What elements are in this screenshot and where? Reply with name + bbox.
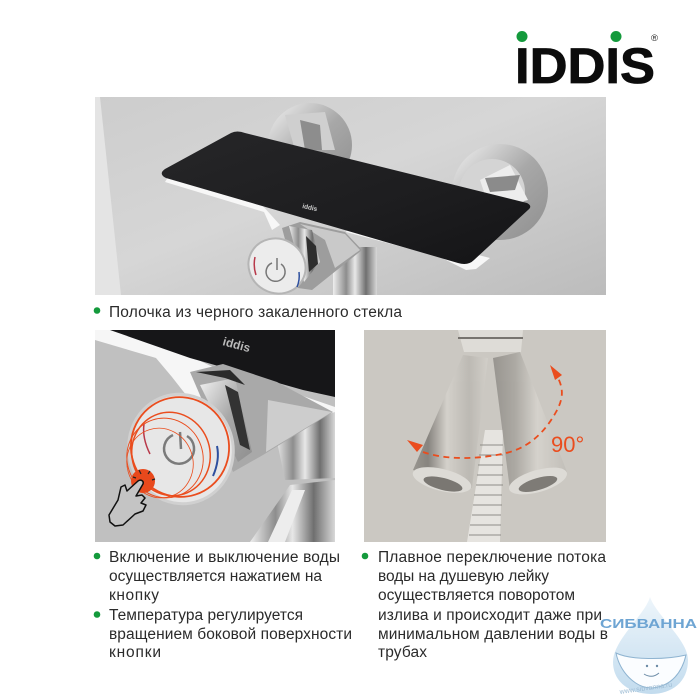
stem: [275, 412, 335, 480]
right column text: воды на душевую лейку: [378, 568, 549, 585]
wall flange right: [452, 144, 548, 240]
spout right position: [493, 352, 570, 500]
caption: shelf: Полочка из черного закаленного стекла: [109, 304, 402, 321]
right column text: трубах: [378, 644, 427, 661]
left column text: вращением боковой поверхности: [109, 626, 352, 643]
right column text: осуществляется поворотом: [378, 587, 575, 604]
photo: knob close-up: iddis: [221, 334, 252, 355]
spout left position: [412, 356, 476, 493]
photo: swivel spout 90 degrees: [364, 330, 606, 542]
knob body: [248, 222, 361, 294]
left column text: кнопку: [109, 587, 159, 604]
left column text: Температура регулируется: [109, 607, 303, 624]
icon: hand pointer: [109, 480, 146, 526]
hose: [467, 430, 503, 542]
label: 90 degrees: 90°: [551, 432, 584, 457]
watermark: Sibvanna: [600, 597, 698, 696]
left column text: кнопки: [109, 644, 161, 661]
knob face: [127, 393, 235, 505]
orange rotation rings: [126, 396, 230, 498]
wall flange left: [274, 104, 352, 159]
logo: IDDIS: IDDIS: [515, 38, 655, 94]
watermark: Sibvanna: www.sibvanna.ru: [618, 682, 673, 696]
right column text: излива и происходит даже при: [378, 607, 602, 624]
shelf corner: [95, 330, 335, 414]
press point: [131, 469, 155, 493]
watermark: Sibvanna: СИБВАННА: [600, 616, 698, 631]
left column text: [94, 549, 352, 661]
right column text: минимальном давлении воды в: [378, 626, 608, 643]
photo: knob close-up: [95, 330, 335, 542]
photo: glass shelf on mixer: [95, 97, 606, 304]
rotation arrow: [407, 365, 562, 458]
right column text: [362, 549, 608, 661]
logo: IDDIS: ®: [651, 33, 658, 44]
right column text: Плавное переключение потока: [378, 549, 606, 566]
mixer stem: [333, 247, 377, 295]
bullet: shelf caption: [94, 307, 100, 314]
top collar: [458, 330, 523, 352]
glass shelf: iddis: [302, 203, 318, 213]
left column text: Включение и выключение воды: [109, 549, 340, 566]
shelf underside: [165, 174, 490, 270]
knob barrel: [190, 364, 333, 472]
glass shelf: [162, 132, 530, 264]
left column text: осуществляется нажатием на: [109, 568, 322, 585]
